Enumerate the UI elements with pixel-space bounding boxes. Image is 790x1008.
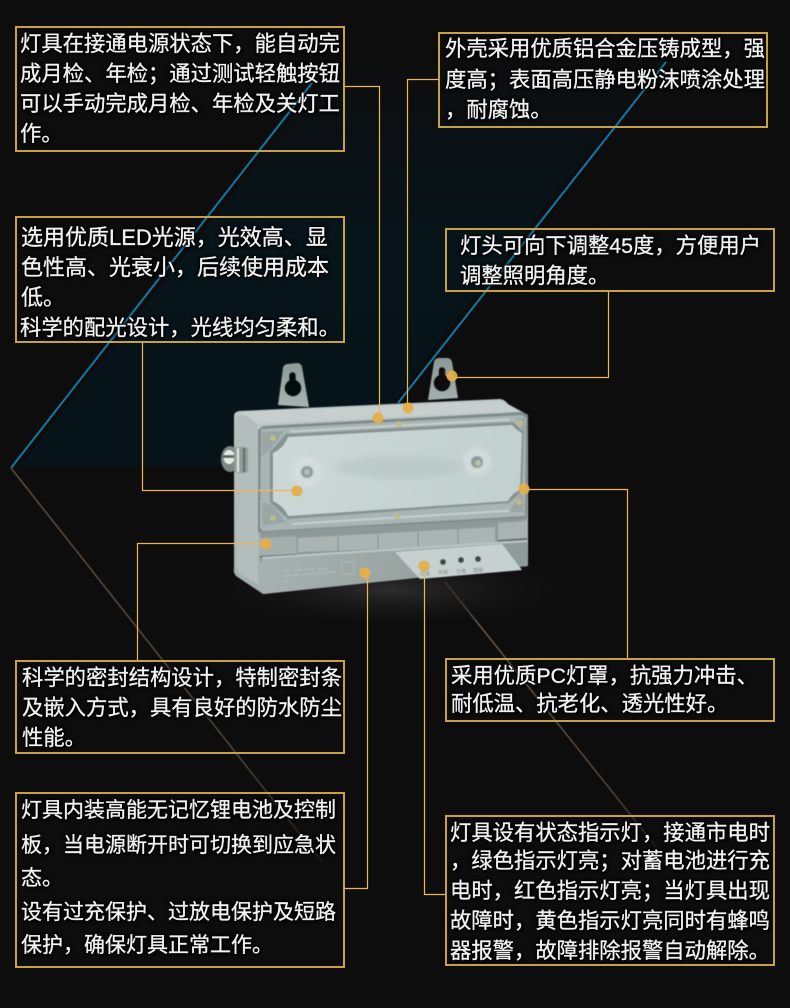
callout: seal: 及嵌入方式，具有良好的防水防尘 xyxy=(22,696,342,720)
connector: lamp head xyxy=(452,292,608,378)
indicator labels: 主电 xyxy=(456,568,466,575)
callout: indicator lights xyxy=(445,815,775,966)
callout: self test: 作。 xyxy=(20,122,63,146)
callout: housing: ，耐腐蚀。 xyxy=(445,98,552,122)
callout: LED light source: 科学的配光设计，光线均匀柔和。 xyxy=(20,316,340,340)
callout: seal xyxy=(15,660,345,754)
frame inner dark ring xyxy=(270,422,524,519)
callout: battery: 板，当电源断开时可切换到应急状 xyxy=(21,834,336,857)
callout: LED light source: 低。 xyxy=(21,285,65,310)
callout: battery: 态。 xyxy=(21,867,63,890)
indicator labels: 应急 xyxy=(420,570,430,577)
callout: housing: 外壳采用优质铝合金压铸成型，强 xyxy=(445,37,765,61)
embossed brand logo xyxy=(284,562,354,576)
connector: battery xyxy=(345,573,368,888)
housing top rim highlight xyxy=(240,401,518,424)
connector: self test xyxy=(345,86,380,418)
callout: self test: 灯具在接通电源状态下，能自动完 xyxy=(20,32,340,56)
callout: lamp head: 灯头可向下调整45度，方便用户 xyxy=(460,234,761,258)
mounting ear right xyxy=(428,358,458,400)
lens light panel xyxy=(273,425,522,516)
callout: lamp head xyxy=(445,228,775,292)
callout: self test xyxy=(15,26,345,152)
cable gland xyxy=(221,446,248,473)
housing body xyxy=(234,399,528,594)
callout: indicator lights: 灯具设有状态指示灯，接通市电时 xyxy=(450,821,770,845)
callout: seal: 性能。 xyxy=(22,726,86,750)
mounting ear left xyxy=(278,363,309,407)
indicator plate xyxy=(395,544,522,579)
connector: LED xyxy=(142,343,297,490)
luminaire device xyxy=(221,358,528,594)
frame top and bottom ribs xyxy=(290,420,520,524)
indicator labels: 故障 xyxy=(473,567,483,574)
dark blue background band xyxy=(20,62,660,466)
callout: LED light source: 色性高、光衰小，后续使用成本 xyxy=(21,255,329,280)
seal strip tabs xyxy=(260,518,527,562)
LED lamp heads xyxy=(291,448,491,488)
faint smudges on lens xyxy=(335,455,465,479)
marker dots xyxy=(260,370,530,578)
indicator lights xyxy=(440,556,481,565)
callout: LED light source: 选用优质LED光源，光效高、显 xyxy=(21,225,328,250)
callout: indicator lights: 故障时，黄色指示灯亮同时有蜂鸣 xyxy=(450,909,770,933)
blue ray left xyxy=(11,83,312,468)
connector: seal xyxy=(138,544,266,660)
callout: self test: 成月检、年检；通过测试轻触按钮 xyxy=(20,62,340,86)
connector: indicator xyxy=(424,566,445,894)
indicator labels xyxy=(420,567,483,577)
front face xyxy=(262,540,528,594)
callout: housing xyxy=(438,32,768,128)
callout: indicator lights: 电时，红色指示灯亮；当灯具出现 xyxy=(450,879,770,903)
callout: self test: 可以手动完成月检、年检及关灯工 xyxy=(20,92,340,116)
callout: indicator lights: ，绿色指示灯亮；对蓄电池进行充 xyxy=(450,849,770,873)
callout: lamp head: 调整照明角度。 xyxy=(460,264,609,288)
callout: indicator lights: 器报警，故障排除报警自动解除。 xyxy=(450,939,770,963)
frame screws xyxy=(270,420,523,521)
housing left side highlight xyxy=(236,416,258,584)
connector: PC cover xyxy=(523,490,628,658)
callout: PC cover xyxy=(445,658,775,722)
brown ray left xyxy=(11,468,322,862)
callout: housing: 度高；表面高压静电粉沫喷涂处理 xyxy=(445,68,765,92)
floor glow xyxy=(170,560,610,620)
callout: battery: 灯具内装高能无记忆锂电池及控制 xyxy=(21,799,336,822)
frame corner highlights xyxy=(262,418,525,526)
callout: battery xyxy=(15,792,345,968)
callout: LED light source xyxy=(15,216,345,343)
callout: battery: 保护，确保灯具正常工作。 xyxy=(21,934,273,957)
connector: housing xyxy=(408,80,438,408)
indicator labels: 充电 xyxy=(438,569,448,576)
transparent lens frame xyxy=(258,412,528,534)
callout: battery: 设有过充保护、过放电保护及短路 xyxy=(21,901,336,924)
callout: PC cover: 耐低温、抗老化、透光性好。 xyxy=(451,692,728,716)
callout: PC cover: 采用优质PC灯罩，抗强力冲击、 xyxy=(451,664,758,688)
callout: seal: 科学的密封结构设计，特制密封条 xyxy=(22,666,342,690)
brown ray right xyxy=(445,582,657,848)
blue ray right xyxy=(398,62,666,403)
